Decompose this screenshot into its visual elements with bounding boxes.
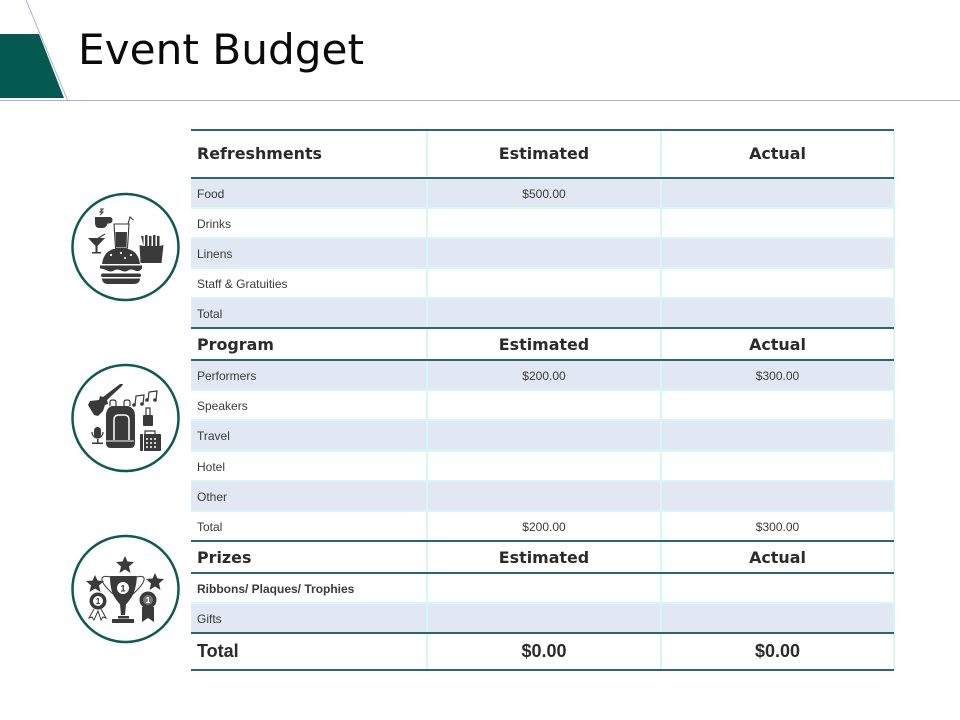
icon: food and drinks [71, 192, 180, 302]
coffee cup [95, 217, 112, 228]
row: Gifts: Gifts [197, 612, 222, 626]
fries [140, 235, 164, 263]
row: grand total: $0.00 [755, 641, 800, 661]
row: Program header: Estimated [499, 335, 589, 354]
row: Prizes header: Actual [749, 548, 806, 567]
row: Staff and Gratuities: Staff & Gratuities [197, 277, 288, 291]
row: Program header [197, 335, 806, 354]
title: Event Budget [78, 25, 364, 74]
small suitcase [143, 415, 153, 426]
row: Refreshments header: Actual [749, 144, 806, 163]
icon: trophy and awards: 1 [96, 597, 101, 606]
row: Linens: Linens [197, 247, 232, 261]
martini [88, 238, 105, 254]
row: Performers [191, 360, 894, 390]
row: Prizes header: Prizes [197, 548, 251, 567]
header accent: green trapezoid and rules [0, 0, 960, 101]
big suitcase [140, 434, 161, 451]
icon: trophy and awards [71, 534, 180, 644]
row: Prizes header: Estimated [499, 548, 589, 567]
row: Program total [197, 520, 799, 534]
row: Program header: Actual [749, 335, 806, 354]
row: Gifts [191, 603, 894, 633]
row: Performers: $200.00 [522, 369, 566, 383]
icon: trophy and awards: 1 [120, 584, 126, 594]
row: Program total: Total [197, 520, 222, 534]
row: Linens [191, 238, 894, 268]
row: Refreshments header: Refreshments [197, 144, 322, 163]
burger top bun [102, 248, 140, 264]
row: grand total: $0.00 [521, 641, 567, 661]
glass liquid [116, 232, 127, 247]
icon: trophy and awards: 1 [146, 596, 151, 605]
row: Ribbons: Ribbons/ Plaques/ Trophies [197, 582, 354, 596]
row: grand total [197, 641, 800, 661]
row: Food: $500.00 [522, 187, 566, 201]
row: Refreshments total [191, 298, 894, 328]
row: Food: Food [197, 187, 224, 201]
row: Hotel: Hotel [197, 460, 225, 474]
row: Other [191, 481, 894, 511]
row: Other: Other [197, 490, 227, 504]
row: Performers: $300.00 [756, 369, 799, 383]
row: Travel [191, 420, 894, 451]
row: Drinks: Drinks [197, 217, 231, 231]
row: Program total: $300.00 [756, 520, 799, 534]
microphone [94, 427, 101, 438]
row: Refreshments header [197, 144, 806, 163]
row: Program total: $200.00 [522, 520, 566, 534]
row: Refreshments header: Estimated [499, 144, 589, 163]
row: Performers: Performers [197, 369, 256, 383]
icon: entertainment and travel [71, 364, 180, 472]
row: Refreshments total: Total [197, 307, 222, 321]
row: Program header: Program [197, 335, 274, 354]
guitar [88, 384, 123, 416]
row: Speakers: Speakers [197, 399, 248, 413]
burger layers [100, 266, 142, 272]
backpack [106, 406, 135, 448]
row: grand total: Total [197, 641, 239, 661]
row: Prizes header [197, 548, 806, 567]
row: Travel: Travel [197, 429, 230, 443]
row: Food [191, 178, 894, 208]
